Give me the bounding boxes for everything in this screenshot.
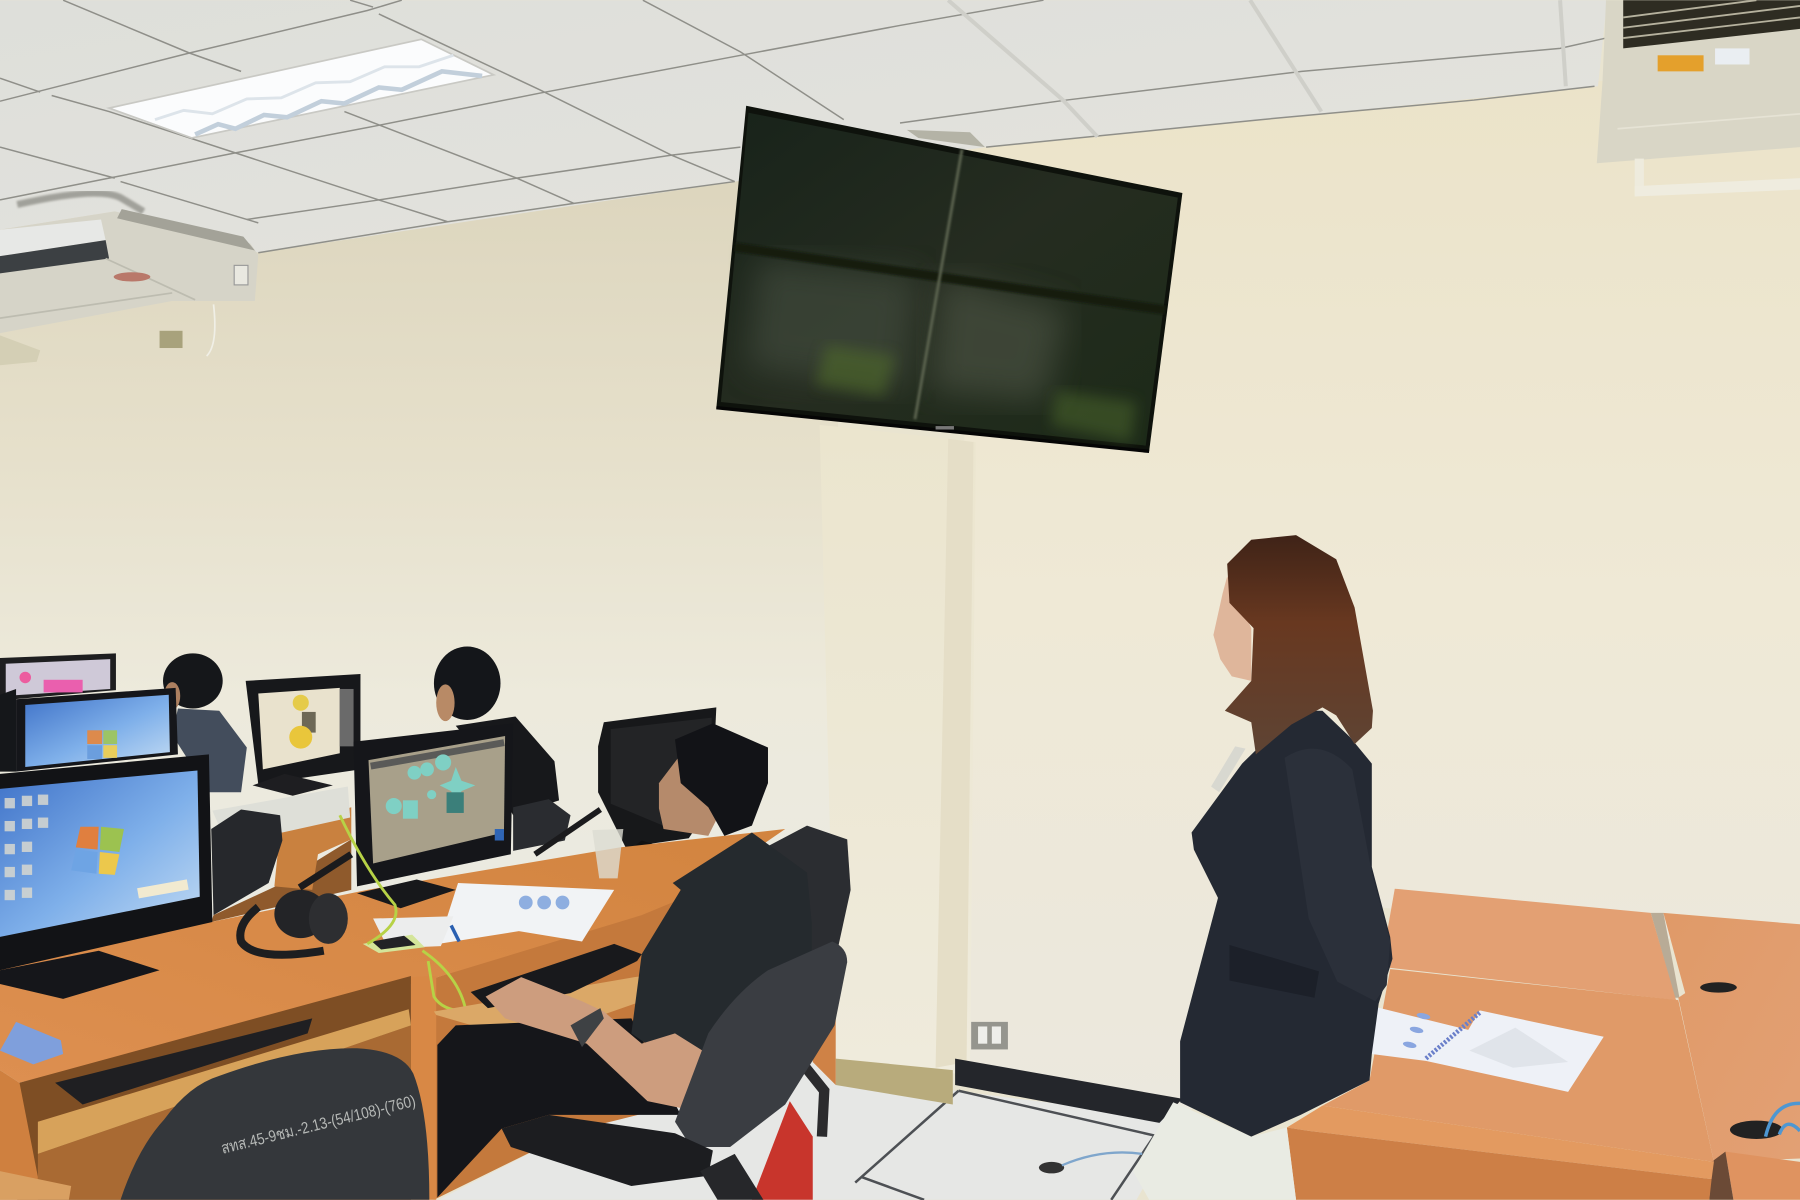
air conditioner right (1597, 0, 1800, 196)
concrete pillar (820, 425, 976, 1074)
papers on desk (373, 883, 614, 948)
power outlet (971, 1022, 1008, 1049)
person rear centre (434, 646, 559, 815)
keyboard tray and keyboard (434, 944, 642, 1041)
student arm (486, 977, 703, 1108)
baseboard (836, 1059, 1182, 1123)
smartwatch (571, 1008, 604, 1047)
rear chair (211, 810, 282, 915)
jacket sleeve (1285, 749, 1390, 1001)
ceiling light fixture (109, 39, 494, 138)
green cable and phone (340, 815, 466, 1012)
face (1213, 576, 1251, 681)
monitor: illustration with teal shapes (354, 723, 513, 908)
left wall (0, 167, 838, 1131)
student torso (631, 832, 812, 1074)
headphones (240, 890, 348, 955)
right desk front (1287, 969, 1714, 1200)
person rear left (163, 653, 247, 792)
red backpack (752, 1101, 813, 1200)
monitor: desktop blue far row (16, 688, 178, 772)
air conditioner left (0, 193, 258, 365)
collar (1211, 746, 1246, 792)
student head (659, 754, 719, 836)
wall-mounted television (716, 106, 1182, 451)
foreground chair: สทส.45-9ชม.-2.13-(54/108)-(760) (219, 1092, 417, 1158)
plastic cup (592, 829, 623, 878)
gap between right desks (1651, 913, 1679, 998)
right wall (964, 81, 1800, 1119)
monitor: desktop foreground (0, 754, 212, 999)
student chair (502, 942, 847, 1200)
hair (1225, 535, 1373, 754)
skirt (1133, 1102, 1296, 1200)
foreground chair (121, 1048, 429, 1200)
monitor back, black (598, 707, 716, 863)
microphone arm (300, 810, 600, 888)
mouse, blue (0, 1022, 63, 1064)
student legs (437, 1018, 681, 1198)
jacket (1180, 711, 1392, 1137)
floor (439, 1062, 1182, 1200)
jacket pocket (1229, 945, 1319, 998)
right desk back (1381, 889, 1676, 1000)
woman standing (1133, 535, 1392, 1200)
open notebook (1361, 1004, 1604, 1092)
rear desks (211, 787, 351, 922)
student at front desk (437, 723, 812, 1198)
rear computer workstation far left (0, 653, 116, 772)
rear chair centre (513, 799, 571, 851)
ceiling (0, 0, 1607, 253)
front long desk (0, 829, 836, 1200)
chair behind front student (766, 826, 851, 1137)
monitor: illustration with yellow shapes (246, 674, 360, 796)
right desk side (1663, 913, 1800, 1200)
